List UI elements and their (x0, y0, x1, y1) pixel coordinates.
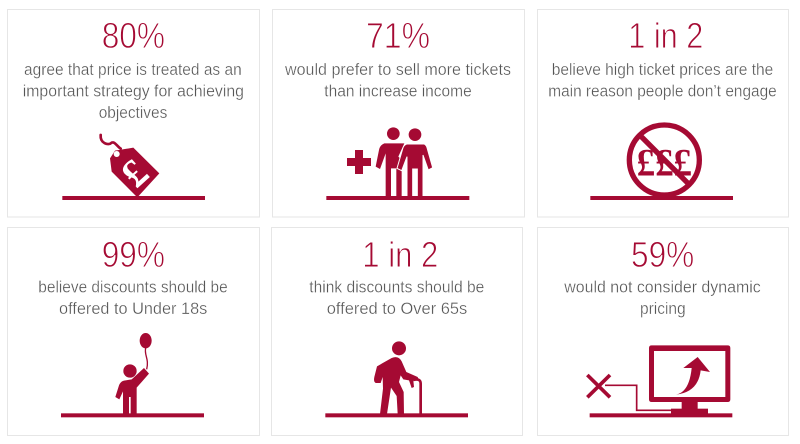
panel: 80% price strategy (8, 10, 260, 217)
text: under 18s description: believe discounts should be (38, 278, 228, 297)
icon: price tag with pound sign: £ (113, 150, 157, 196)
icon: plus sign and two people (326, 127, 469, 200)
heading: 1 in 2: 1 in 2 (628, 15, 703, 56)
panel: 71% sell more tickets (272, 10, 524, 217)
text: high prices description: main reason people don’t engage (548, 82, 777, 100)
heading: 71%: 71% (366, 15, 430, 56)
icon: crossed-out pound signs (590, 125, 733, 200)
icon: elderly person with cane (325, 341, 468, 417)
text: price strategy description: objectives (99, 103, 167, 122)
heading: 59%: 59% (631, 234, 694, 275)
text: tickets description: would prefer to sell more tickets (284, 60, 511, 79)
icon: price tag with pound sign (62, 135, 205, 200)
panel: 59% dynamic pricing (538, 228, 788, 436)
text: dynamic pricing description (563, 278, 761, 318)
text: price strategy description (23, 60, 244, 122)
text: dynamic pricing description: pricing (640, 299, 686, 318)
text: over 65s description: think discounts should be (309, 278, 484, 297)
icon: unplugged monitor with rising arrow (587, 345, 732, 417)
panel: 99% discounts for under 18s (8, 228, 260, 436)
text: high prices description: believe high ticket prices are the (552, 60, 773, 79)
heading: 99%: 99% (102, 234, 165, 275)
text: tickets description (284, 60, 511, 100)
text: tickets description: than increase income (324, 82, 472, 100)
text: price strategy description: agree that price is treated as an (24, 60, 242, 79)
text: dynamic pricing description: would not consider dynamic (563, 278, 761, 297)
text: over 65s description: offered to Over 65s (327, 299, 467, 318)
text: over 65s description (309, 278, 484, 318)
text: under 18s description (38, 278, 228, 318)
text: under 18s description: offered to Under 18s (59, 299, 207, 318)
text: price strategy description: important strategy for achieving (23, 82, 244, 100)
icon: crossed-out pound signs: £££ (637, 140, 692, 184)
panel: 1 in 2 high ticket prices (538, 10, 788, 217)
panel: 1 in 2 discounts for over 65s (272, 228, 522, 436)
text: high prices description (548, 60, 777, 100)
icon: child with balloon (61, 333, 204, 417)
heading: 1 in 2: 1 in 2 (362, 234, 438, 275)
heading: 80%: 80% (102, 15, 165, 56)
